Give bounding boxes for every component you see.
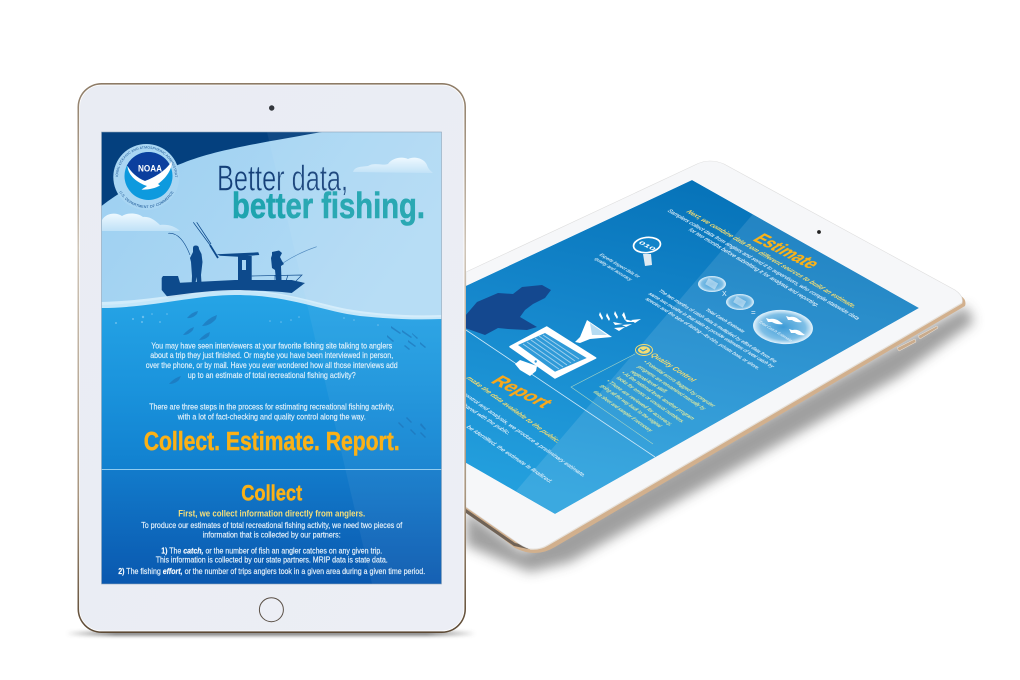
left angler [190,246,202,283]
label: total catch estimate: Total Catch Estimate [703,308,746,334]
collect body text: information that is collected by our partners: [203,531,341,540]
intro paragraph 2: There are three steps in the process for estimating recreational fishing activity, [149,402,394,411]
right angler [271,250,284,280]
back tablet dark edge wedge [466,509,528,549]
subheading: estimate: Next, we combine data from different sources to build an estimate. [684,209,859,309]
text: two months paragraph: species and the type of fishing—for-hire, private boat, or shore. [643,297,761,371]
wave highlight [102,290,442,319]
text: quality control bullets: programs are reexamined manually by [635,365,707,411]
bubbles [115,313,379,326]
text: two months paragraph: The two months of catch data is multiplied by effort data from the [656,289,778,364]
icon: quality control check [636,344,652,356]
icon: monitor with funnel and fish [510,311,641,378]
subheading: report: make the data available to the public. [464,375,563,444]
cloud left [102,213,180,231]
heading: Collect: Collect [241,481,303,506]
text: quality control bullets: • Potential errors flagged by computer [641,360,716,408]
quality control box [571,354,653,444]
text: quality control bullets: going all the way back to the original [598,385,663,428]
icon: magnifying glass on data [633,236,661,266]
text: experts inspect data [594,254,640,280]
back tablet shadow [466,306,974,572]
back tablet inner edge strip [530,303,962,549]
text: quality control bullets: regional-level staff. [628,370,669,394]
title: Better data, [217,158,348,199]
text: experts inspect data: quality and accuracy [592,257,634,282]
collect body text [118,521,425,576]
section divider [102,469,442,470]
front tablet shadow [66,631,476,636]
bubbles equation: X [722,291,727,298]
title: better fishing. [232,185,425,226]
water [102,291,442,470]
section divider line [460,326,655,457]
text: samplers paragraph: for two months before submitting it for analysis and reporting. [686,228,821,308]
back tablet screen [440,180,919,514]
headline: Collect. Estimate. Report.: Collect. Estimate. Report. [144,428,400,456]
collect body text: To produce our estimates of total recreational fishing activity, we need two pieces of [141,521,403,530]
sky [102,132,442,322]
back tablet gold edge [466,296,966,553]
silhouette of person [466,285,551,335]
front tablet gold frame [78,83,466,633]
text: quality control bullets: looks for errors or unusual numbers. [614,376,686,424]
front tablet screen [102,132,442,584]
text: experts inspect data: Experts inspect data for [597,253,641,279]
text: report paragraph: shared with the public. [458,402,513,436]
text: samplers paragraph: Samplers collect data from anglers and send it to supervisors, who compile statewide data [665,209,862,321]
screen background [440,180,919,514]
back tablet camera [817,230,821,234]
text: quality control bullets: data sheet and sampler if necessary. [591,391,654,433]
NOAA wordmark: NOAA [138,164,162,174]
collect body text: This information is collected by our state partners. MRIP data is state data. [156,556,388,565]
title [219,164,424,226]
NOAA logo: U.S. DEPARTMENT OF COMMERCE [120,190,174,208]
collect body text: 1) The catch, or the number of fish an angler catches on any given trip. [161,546,382,555]
intro paragraph 1: about a trip they just finished. Or maybe you have been interviewed in person, [150,351,393,360]
front tablet [70,83,472,638]
text: quality control bullets [591,360,716,433]
front tablet camera [269,105,274,111]
text: quality control bullets: • These are reviewed for accuracy, [604,380,674,427]
cloud right [353,158,433,173]
hull [162,276,305,300]
t-top and console [217,252,259,281]
text: report paragraph: be identified, the estimate is finalized. [464,425,555,484]
collect body text: 2) The fishing effort, or the number of trips anglers took in a given area during a given time period. [118,567,425,576]
logo ring text: NATIONAL OCEANIC AND ATMOSPHERIC ADMINISTRATION [116,146,178,178]
boat with anglers [162,222,317,300]
back tablet [440,161,974,572]
NOAA logo [113,144,178,208]
intro paragraph 1: over the phone, or by mail. Have you ever wondered how all those interviews add [146,361,398,370]
intro paragraph 1 [146,341,398,380]
seagull [128,161,172,190]
navy corner swoosh [102,132,322,206]
text: report paragraph: control and analysis, we produce a preliminary estimate. [460,392,588,478]
rods [193,222,211,245]
icon: magnifying glass on data: 010 [636,240,658,252]
back tablet body [466,161,962,549]
screen border [102,132,442,584]
front tablet bezel [80,85,464,631]
fish school [169,311,426,438]
back tablet side buttons [897,326,938,351]
bubbles equation [698,276,814,346]
text: two months paragraph: same two months in that state to provide estimates of total catch by [646,292,775,369]
bubbles equation: = [751,308,756,317]
intro paragraph 2 [149,402,394,421]
deep water section [102,470,442,584]
light reflection [267,132,442,584]
heading: Estimate: Estimate [748,231,824,272]
bubbles equation: Total Catch Estimate [757,320,794,342]
heading: quality control: Quality Control [648,352,698,383]
intro paragraph 1: You may have seen interviewers at your favorite fishing site talking to anglers [151,341,392,350]
intro paragraph 2: with a lot of fact-checking and quality control along the way. [177,412,366,421]
subheading: collect: First, we collect information directly from anglers. [178,508,365,519]
heading: Report: Report [486,373,557,411]
intro paragraph 1: up to an estimate of total recreational fishing activity? [188,371,356,380]
home button [259,598,283,622]
text: quality control bullets: • At the national level, another program [619,371,695,421]
